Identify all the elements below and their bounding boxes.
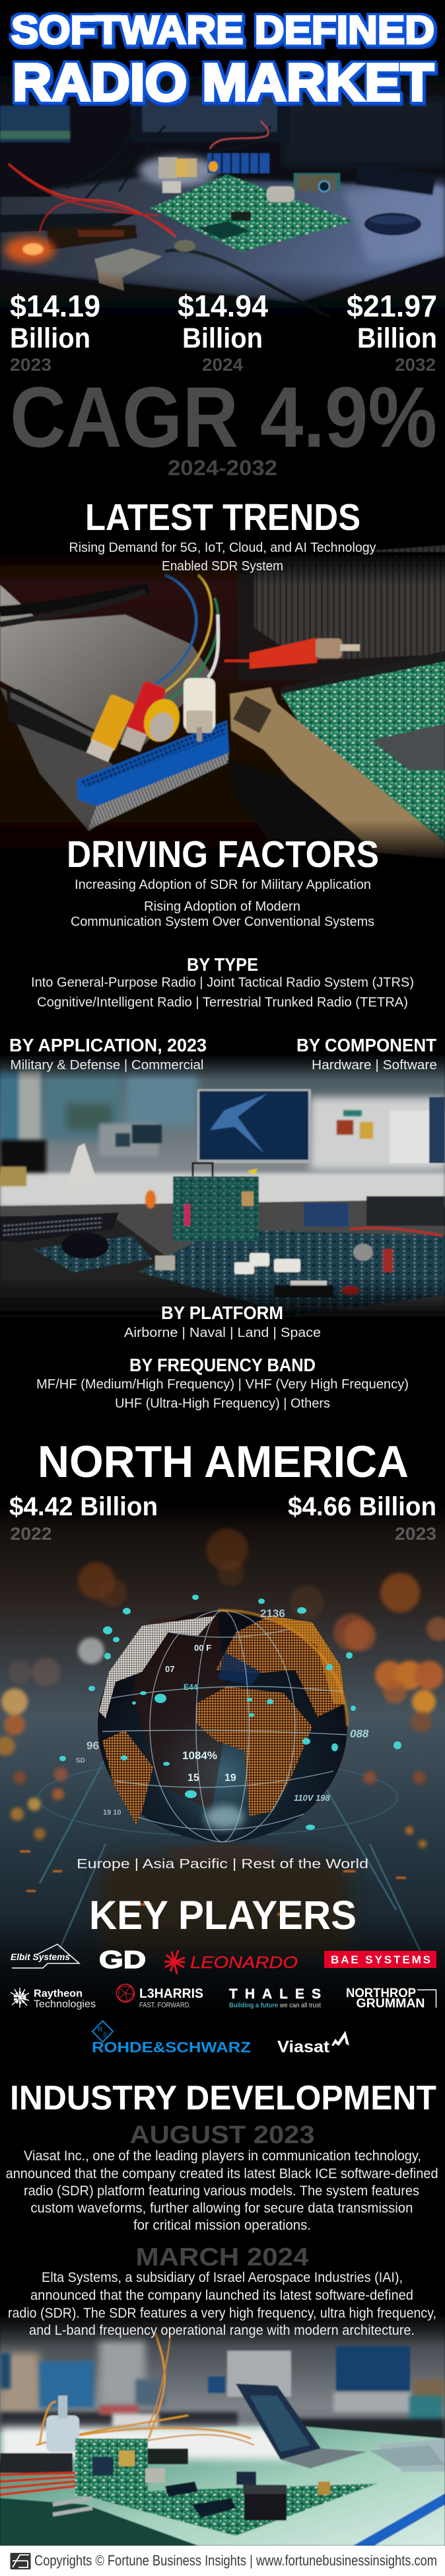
stat: 2032 market size [347,289,437,375]
development: August 2023: for critical mission operations. [133,2218,311,2233]
development: March 2024: MARCH 2024 [136,2244,309,2271]
segment: by platform: BY PLATFORM [161,1303,283,1323]
development: March 2024: Elta Systems, a subsidiary of Israel Aerospace Industries (IAI), [42,2270,403,2285]
segment: by component: BY COMPONENT [296,1035,436,1055]
development: August 2023: Viasat Inc., one of the leading players in communication technology, [24,2148,421,2164]
development: March 2024 [8,2244,436,2338]
text: driving factors detail: Increasing Adoption of SDR for Military Application [75,878,371,892]
stat: north america 2023 [288,1492,436,1544]
text: driving factors detail [71,878,374,929]
stat: 2023 market size: 2023 [10,355,51,375]
logo: Rohde & Schwarz: S [103,2031,107,2038]
logo: Raytheon Technologies: Technologies [34,1998,96,2010]
globe: 07 [165,1664,174,1674]
text: latest trends detail: Rising Demand for 5G, IoT, Cloud, and AI Technology [69,541,376,555]
globe: 00 F [194,1643,211,1653]
logo: Northrop Grumman: NORTHROP [346,1987,416,2000]
stat: north america 2022: $4.42 Billion [9,1492,158,1521]
stat: 2023 market size: $14.19 [10,289,100,323]
stat: 2024 market size: $14.94 [178,289,268,323]
segment: by component [296,1035,437,1073]
text: driving factors detail: Rising Adoption of Modern [144,899,300,914]
segment: by type: Cognitive/Intelligent Radio | Terrestrial Trunked Radio (TETRA) [37,995,408,1010]
globe: SD [76,1757,85,1764]
stat: north america 2022: 2022 [11,1524,51,1544]
photo: circuit board on desk [0,59,445,330]
photo: electronics lab [0,1054,445,1320]
development: August 2023: radio (SDR) platform featuring various models. The system features [24,2183,419,2199]
globe: 110V 198 [294,1793,330,1803]
bokeh lights [0,1529,445,1848]
logo: Viasat [277,2031,349,2057]
heading: driving factors: DRIVING FACTORS [67,833,379,876]
globe: E44 [184,1683,198,1692]
stat: 2032 market size: $21.97 [347,289,437,323]
globe: 15 [188,1772,199,1784]
title [11,8,434,112]
heading: latest trends: LATEST TRENDS [85,496,360,539]
logo: Northrop Grumman [346,1987,436,2010]
heading: key players: KEY PLAYERS [89,1893,357,1938]
logo: Thales: THALES [229,1987,321,2002]
globe: 2136 [260,1607,285,1620]
text: driving factors detail: Communication System Over Conventional Systems [71,915,374,929]
logo: General Dynamics: GD [99,1946,146,1973]
logo: Thales [229,1987,321,2009]
globe: 1084% [182,1749,217,1762]
segment: by component: Hardware | Software [312,1058,437,1073]
logo: Elbit Systems: Elbit Systems [11,1952,70,1962]
development: August 2023: custom waveforms, further allowing for secure data transmission [30,2201,413,2216]
heading: industry development: INDUSTRY DEVELOPMENT [10,2079,436,2117]
segment: by frequency band: UHF (Ultra-High Frequency) | Others [115,1396,330,1411]
segment: by frequency band: MF/HF (Medium/High Frequency) | VHF (Very High Frequency) [36,1377,409,1392]
segment: by type: Into General-Purpose Radio | Joint Tactical Radio System (JTRS) [31,975,414,990]
logo: Northrop Grumman: GRUMMAN [357,1997,425,2010]
stat: north america 2022 [9,1492,158,1544]
logo: BAE Systems: BAE SYSTEMS [331,1953,430,1966]
logo: Thales: Building a future we can all trust [229,2001,321,2009]
stat: 2032 market size: Billion [357,322,437,354]
logo: Elbit Systems [11,1944,79,1968]
globe: 19 [224,1772,236,1784]
circuit traces [38,1745,423,1956]
photo: cables and connectors [0,545,445,862]
title: SOFTWARE DEFINED [11,8,434,52]
stat: 2024 market size [178,289,268,375]
development: August 2023: AUGUST 2023 [129,2121,314,2149]
development: March 2024: and L-band frequency operational range with modern architecture. [29,2323,415,2338]
photo: digital globe over circuit board [0,1497,445,2019]
segment: by type [31,954,414,1010]
stat: 2024 market size: 2024 [202,355,243,375]
stat: north america 2023: $4.66 Billion [288,1492,436,1521]
logo: BAE Systems [324,1951,436,1968]
stat: 2032 market size: 2032 [395,355,436,375]
segment: by type: BY TYPE [187,954,258,975]
segment: by application: Military & Defense | Commercial [11,1058,203,1073]
segment: by frequency band [36,1355,409,1411]
CAGR period: 2024-2032 [168,456,277,480]
stat: 2023 market size [10,289,100,375]
logo: Raytheon Technologies [11,1988,96,2010]
stat: 2023 market size: Billion [10,322,90,354]
globe: 19 10 [103,1809,121,1817]
globe: 96 [86,1739,99,1752]
icon: Fortune Business Insights logo [11,2553,30,2569]
logo: Viasat: Viasat [277,2038,330,2057]
stat: north america 2023: 2023 [395,1524,436,1544]
development: March 2024: announced that the company launched its latest software-defined [30,2288,413,2303]
segment: by platform: Airborne | Naval | Land | Space [124,1326,321,1340]
footer [0,2546,445,2576]
logo: Raytheon Technologies: Raytheon [34,1988,83,2000]
logo: Rohde & Schwarz: ROHDE&SCHWARZ [92,2039,251,2056]
segment: by application [9,1035,207,1073]
stat: 2024 market size: Billion [182,322,263,354]
heading: north america: NORTH AMERICA [38,1437,409,1487]
logo: L3Harris [116,1984,203,2009]
logo: Rohde & Schwarz: R [98,2026,102,2033]
text: other regions: Europe | Asia Pacific | Rest of the World [77,1857,368,1872]
segment: by frequency band: BY FREQUENCY BAND [129,1355,316,1375]
title: RADIO MARKET [13,53,434,112]
logo: L3Harris: L3HARRIS [139,1987,203,2001]
globe: 088 [350,1727,369,1740]
logo: Leonardo: LEONARDO [190,1953,298,1972]
photo: SDR board in lab [0,2313,445,2546]
development: August 2023 [6,2121,438,2233]
text: latest trends detail [69,541,376,574]
logo: Rohde & Schwarz [92,2021,251,2056]
globe [59,1595,401,1864]
segment: by platform [124,1303,321,1340]
segment: by application: BY APPLICATION, 2023 [9,1035,207,1055]
logo: Leonardo [164,1950,298,1974]
logo: L3Harris: FAST. FORWARD. [139,2001,191,2009]
text: latest trends detail: Enabled SDR System [162,559,283,574]
